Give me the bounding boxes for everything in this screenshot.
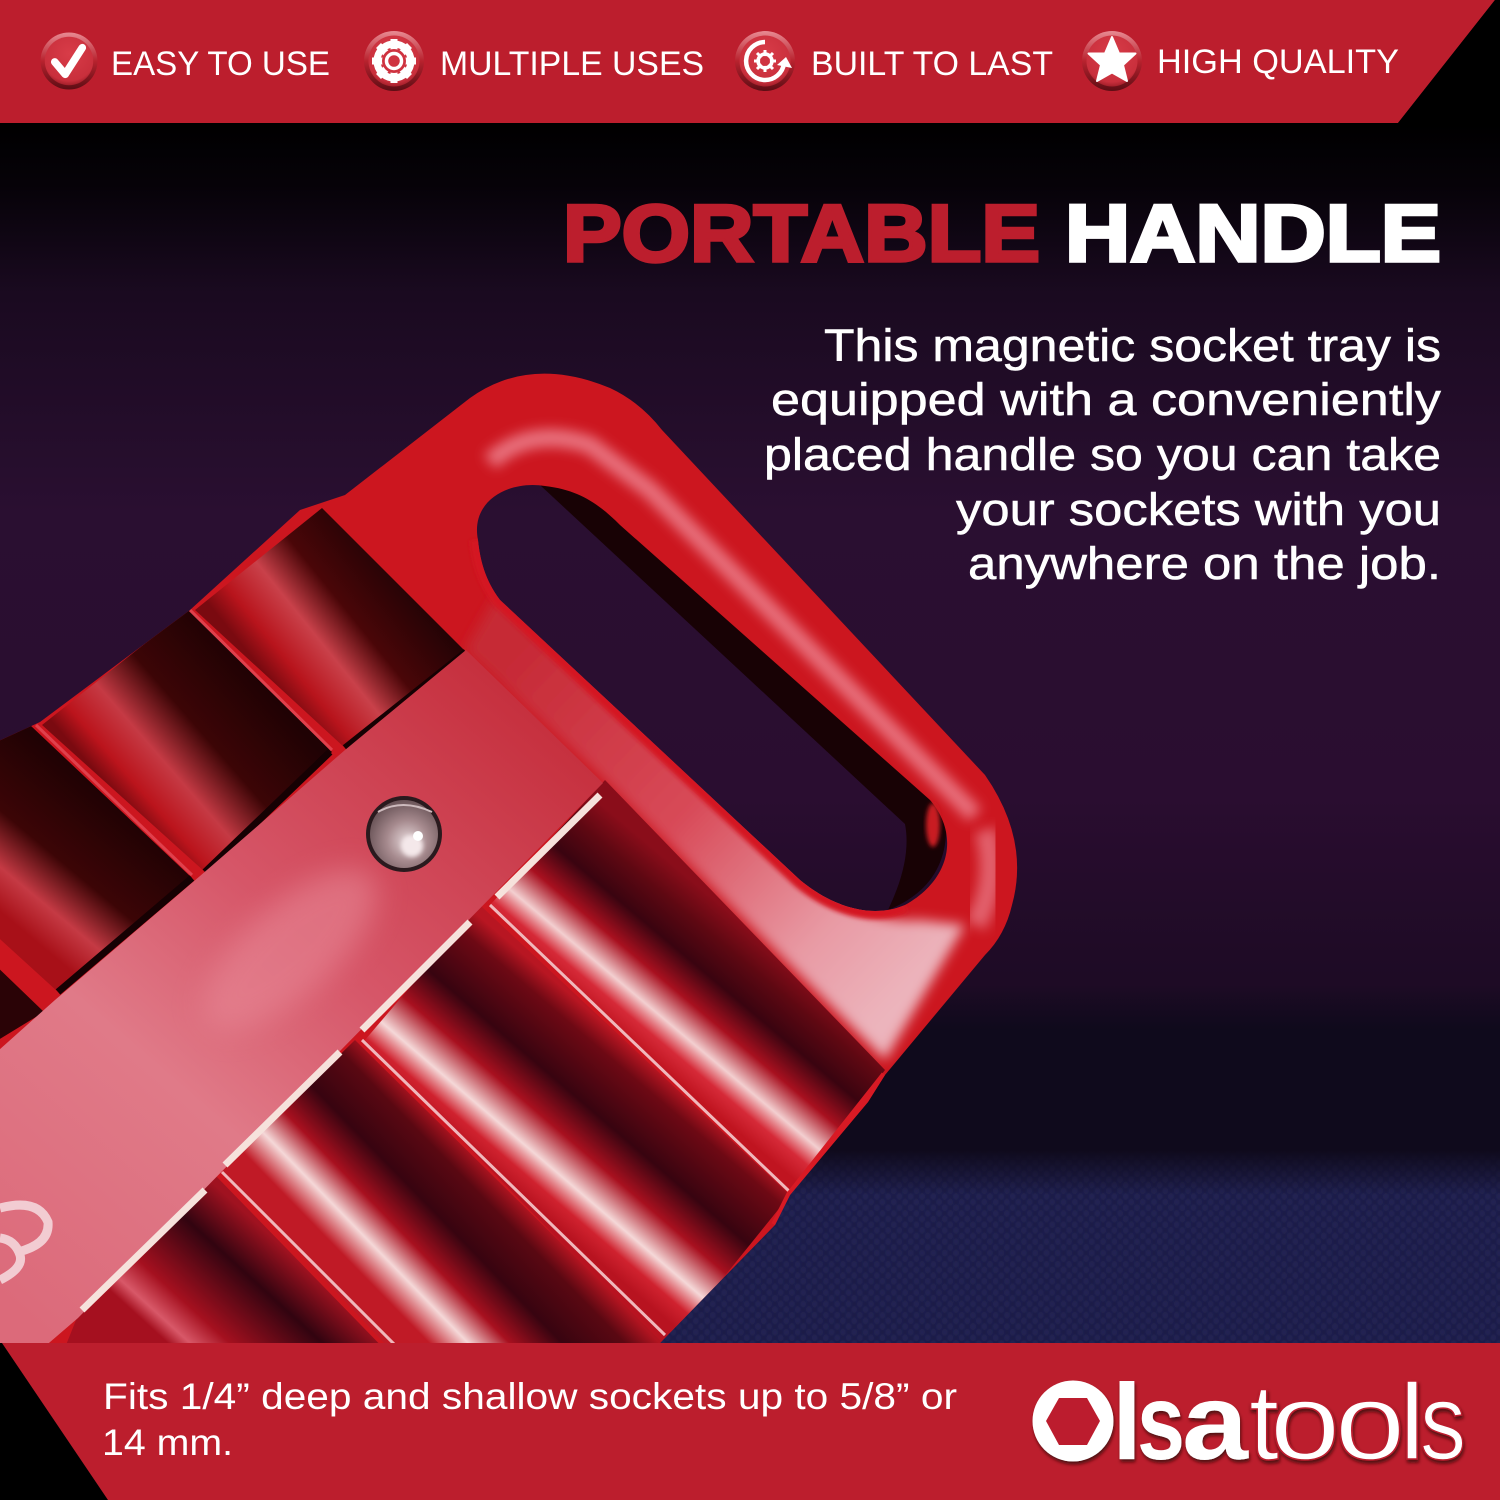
logo: Olsatools: o [1270,1361,1340,1482]
body copy: your sockets with you [956,484,1441,535]
feature: built to last [735,31,1053,91]
logo: Olsatools: s [1420,1361,1466,1482]
magnetic socket tray with handle [0,374,1018,1343]
red glint on inner wall [926,803,940,847]
tray base [0,360,1090,1360]
logo hexagon [1046,1398,1100,1445]
icon: refresh gear [735,31,795,91]
icon: star [1082,31,1142,91]
central pink strip [0,650,603,1385]
body copy: This magnetic socket tray is [824,320,1441,371]
handle lit bevels [465,438,991,1060]
body copy: placed handle so you can take [764,429,1441,480]
feature: multiple uses [364,31,704,91]
fit note: 14 mm. [102,1422,233,1463]
logo: Olsatools: s [1137,1361,1185,1482]
logo: Olsatools: O [1038,1361,1108,1482]
logo: Olsatools: l [1112,1361,1142,1482]
feature: easy to use [40,32,330,90]
body copy [764,320,1442,589]
body copy: equipped with a conveniently [771,374,1442,425]
handle inner wall [540,485,946,910]
bottom banner [2,1343,1500,1500]
rivet [366,796,442,872]
top banner [0,0,1495,123]
icon: check [40,32,98,90]
icon: gear [364,31,424,91]
heading [563,189,1441,279]
feature: easy to use: EASY TO USE [111,45,330,83]
soft sheen on strip [205,862,384,1029]
logo: Olsatools: o [1335,1361,1405,1482]
printed mark on tray [0,1205,48,1280]
heading: PORTABLE [563,189,1040,279]
feature: high quality: HIGH QUALITY [1157,43,1399,81]
lower socket channels [60,780,885,1360]
feature: built to last: BUILT TO LAST [811,45,1053,83]
logo: Olsatools: t [1249,1361,1279,1482]
heading: HANDLE [1065,189,1441,279]
logo: Olsatools [1032,1361,1466,1482]
white slot lines [82,795,600,1310]
feature: high quality [1082,31,1399,91]
corner black wedge [1398,0,1500,123]
body copy: anywhere on the job. [968,538,1441,589]
logo: Olsatools: l [1399,1361,1425,1482]
fit note: Fits 1/4” deep and shallow sockets up to 5/8” or [103,1376,957,1417]
upper socket pockets [0,508,466,1045]
feature: multiple uses: MULTIPLE USES [440,45,704,83]
corner black wedge, bottom left [0,1343,108,1500]
logo: Olsatools: a [1182,1361,1249,1482]
fit note [102,1376,957,1463]
